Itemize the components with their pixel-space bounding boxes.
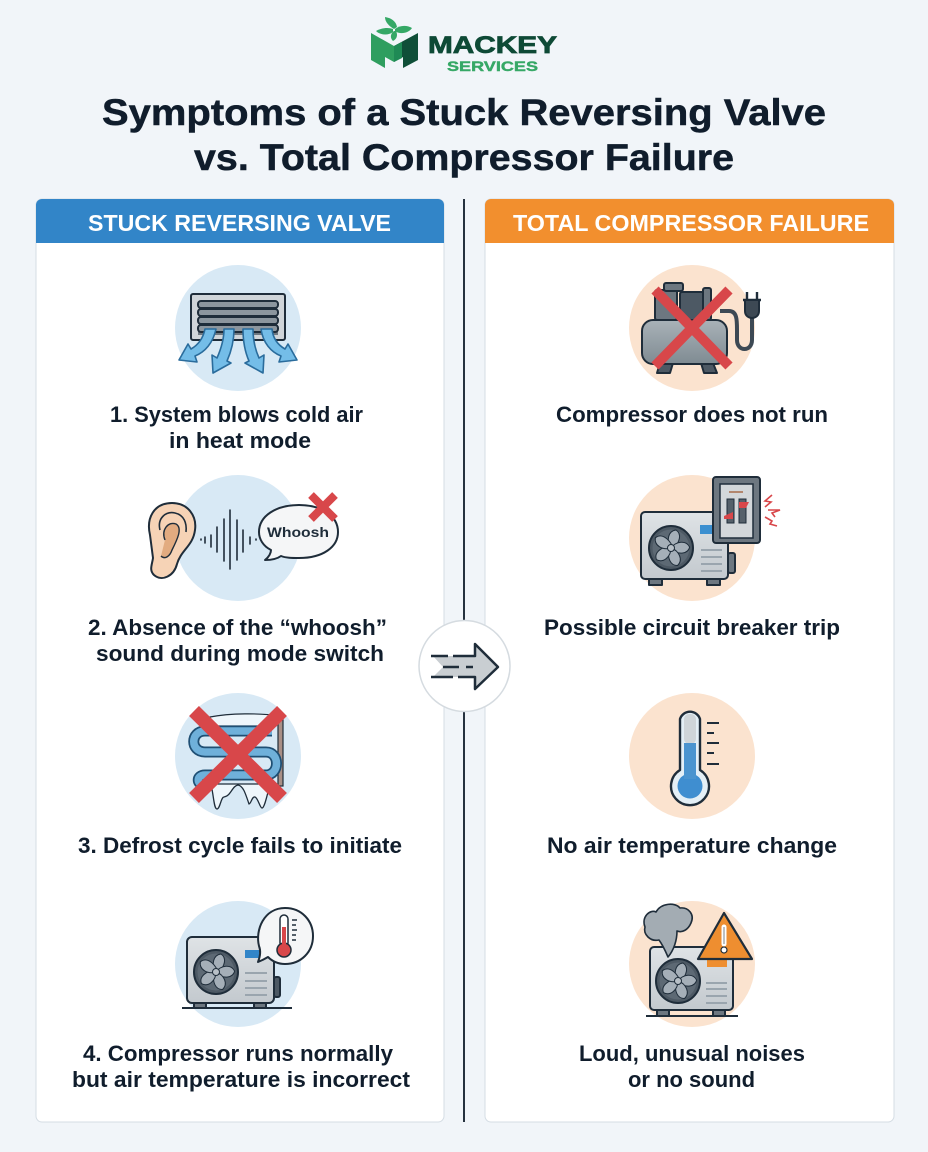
ice top and icicles — [210, 714, 279, 726]
icon: fan above cube — [376, 17, 412, 41]
panel header: STUCK REVERSING VALVE — [88, 210, 391, 236]
panel card — [36, 199, 444, 1122]
smoke cloud — [644, 904, 692, 957]
red x — [311, 495, 335, 519]
sound wave — [201, 510, 256, 569]
text: failure sign 2: Possible circuit breaker trip — [544, 615, 840, 640]
panel: total compressor failure — [485, 199, 894, 1122]
panel card — [485, 199, 894, 1122]
panel header: TOTAL COMPRESSOR FAILURE — [513, 210, 869, 236]
center divider line — [463, 199, 465, 1122]
icon: wall vent blowing cold air — [175, 265, 301, 391]
ear — [149, 503, 195, 578]
serpentine coil — [194, 731, 276, 785]
red x — [655, 290, 729, 366]
icon: frozen coil crossed out — [175, 693, 301, 819]
text: symptom 4 — [72, 1041, 411, 1092]
wordmark: MACKEY — [428, 32, 557, 59]
icon: compressor crossed out with plug — [629, 265, 761, 391]
warning triangle — [698, 913, 752, 967]
cord and plug — [720, 292, 761, 349]
text: failure sign 1: Compressor does not run — [556, 402, 828, 427]
text: failure sign 4: or no sound — [628, 1067, 755, 1092]
red x — [194, 711, 282, 798]
panel: stuck reversing valve — [36, 199, 444, 1122]
breaker panel — [713, 477, 760, 543]
title — [102, 92, 826, 178]
speech bubble: Whoosh — [267, 524, 329, 540]
panel header — [485, 199, 894, 243]
panel header — [36, 199, 444, 243]
icon: smoking outdoor unit with warning triangle — [629, 901, 755, 1027]
text: symptom 2 — [88, 615, 387, 666]
title: Symptoms of a Stuck Reversing Valve — [102, 92, 826, 133]
text: failure sign 3: No air temperature change — [547, 833, 837, 858]
title: vs. Total Compressor Failure — [194, 137, 734, 178]
arrow badge — [419, 620, 510, 712]
icon: ear, sound wave and crossed whoosh bubble — [149, 475, 338, 601]
compressor body — [642, 283, 727, 373]
icon: outdoor unit with thermometer bubble — [175, 901, 313, 1027]
right frame — [278, 720, 283, 786]
text: symptom 3: 3. Defrost cycle fails to initiate — [78, 833, 402, 858]
text: symptom 4: 4. Compressor runs normally — [83, 1041, 394, 1066]
text: failure sign 4 — [579, 1041, 805, 1092]
sub-wordmark: SERVICES — [447, 58, 538, 74]
text: symptom 1 — [110, 402, 363, 453]
icon: cube M mark — [371, 33, 418, 68]
text: symptom 2: sound during mode switch — [96, 641, 384, 666]
text: symptom 4: but air temperature is incorrect — [72, 1067, 411, 1092]
icon: outdoor unit with breaker panel — [629, 475, 780, 601]
text: symptom 1: 1. System blows cold air — [110, 402, 363, 427]
text: symptom 1: in heat mode — [169, 428, 311, 453]
text: symptom 2: 2. Absence of the “whoosh” — [88, 615, 387, 640]
text: failure sign 4: Loud, unusual noises — [579, 1041, 805, 1066]
speech bubble — [259, 505, 338, 560]
icon: thermometer — [629, 693, 755, 819]
sparks — [765, 495, 780, 526]
thermometer bubble — [258, 908, 313, 964]
logo: Mackey Services — [371, 17, 557, 74]
